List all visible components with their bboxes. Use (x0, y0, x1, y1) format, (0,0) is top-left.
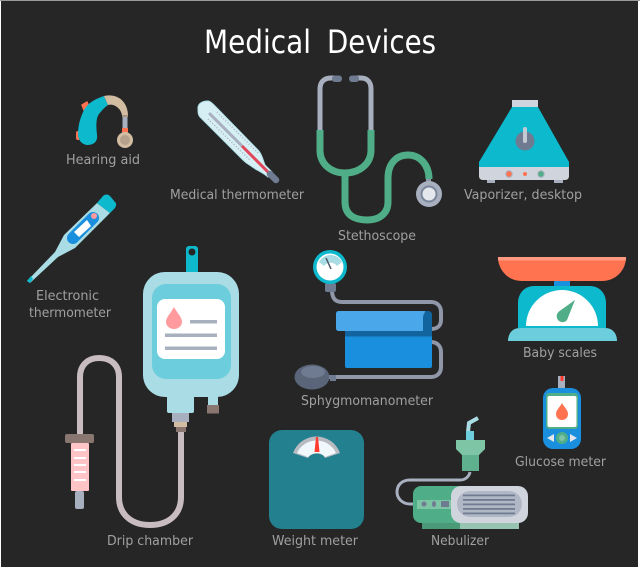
label: electronic thermometer: thermometer (29, 305, 111, 321)
label: drip chamber: Drip chamber (107, 533, 193, 549)
title: Medical (204, 23, 311, 61)
icon: electronic thermometer (27, 194, 116, 283)
icon: nebulizer (397, 418, 528, 529)
icon: vaporizer (479, 100, 569, 183)
label: electronic thermometer: Electronic (36, 288, 99, 304)
label: stethoscope: Stethoscope (338, 228, 416, 244)
icon: baby scales (498, 257, 626, 341)
label: glucose meter: Glucose meter (515, 454, 606, 470)
icon: hearing aid (76, 95, 133, 148)
icon: stethoscope (320, 76, 442, 220)
icon: glucose meter (543, 376, 581, 449)
label: medical thermometer: Medical thermometer (170, 187, 304, 203)
label: weight meter: Weight meter (272, 533, 358, 549)
icon: medical thermometer (198, 101, 276, 180)
label: electronic thermometer (29, 288, 111, 321)
label: hearing aid: Hearing aid (66, 152, 140, 168)
label: baby scales: Baby scales (523, 345, 597, 361)
label: sphygmomanometer: Sphygmomanometer (301, 393, 433, 409)
title: Devices (327, 23, 436, 61)
label: nebulizer: Nebulizer (431, 533, 489, 549)
icon: sphygmomanometer (294, 250, 441, 390)
icon: drip chamber (65, 246, 239, 525)
icon: weight meter (269, 430, 364, 529)
label: vaporizer: Vaporizer, desktop (464, 187, 582, 203)
